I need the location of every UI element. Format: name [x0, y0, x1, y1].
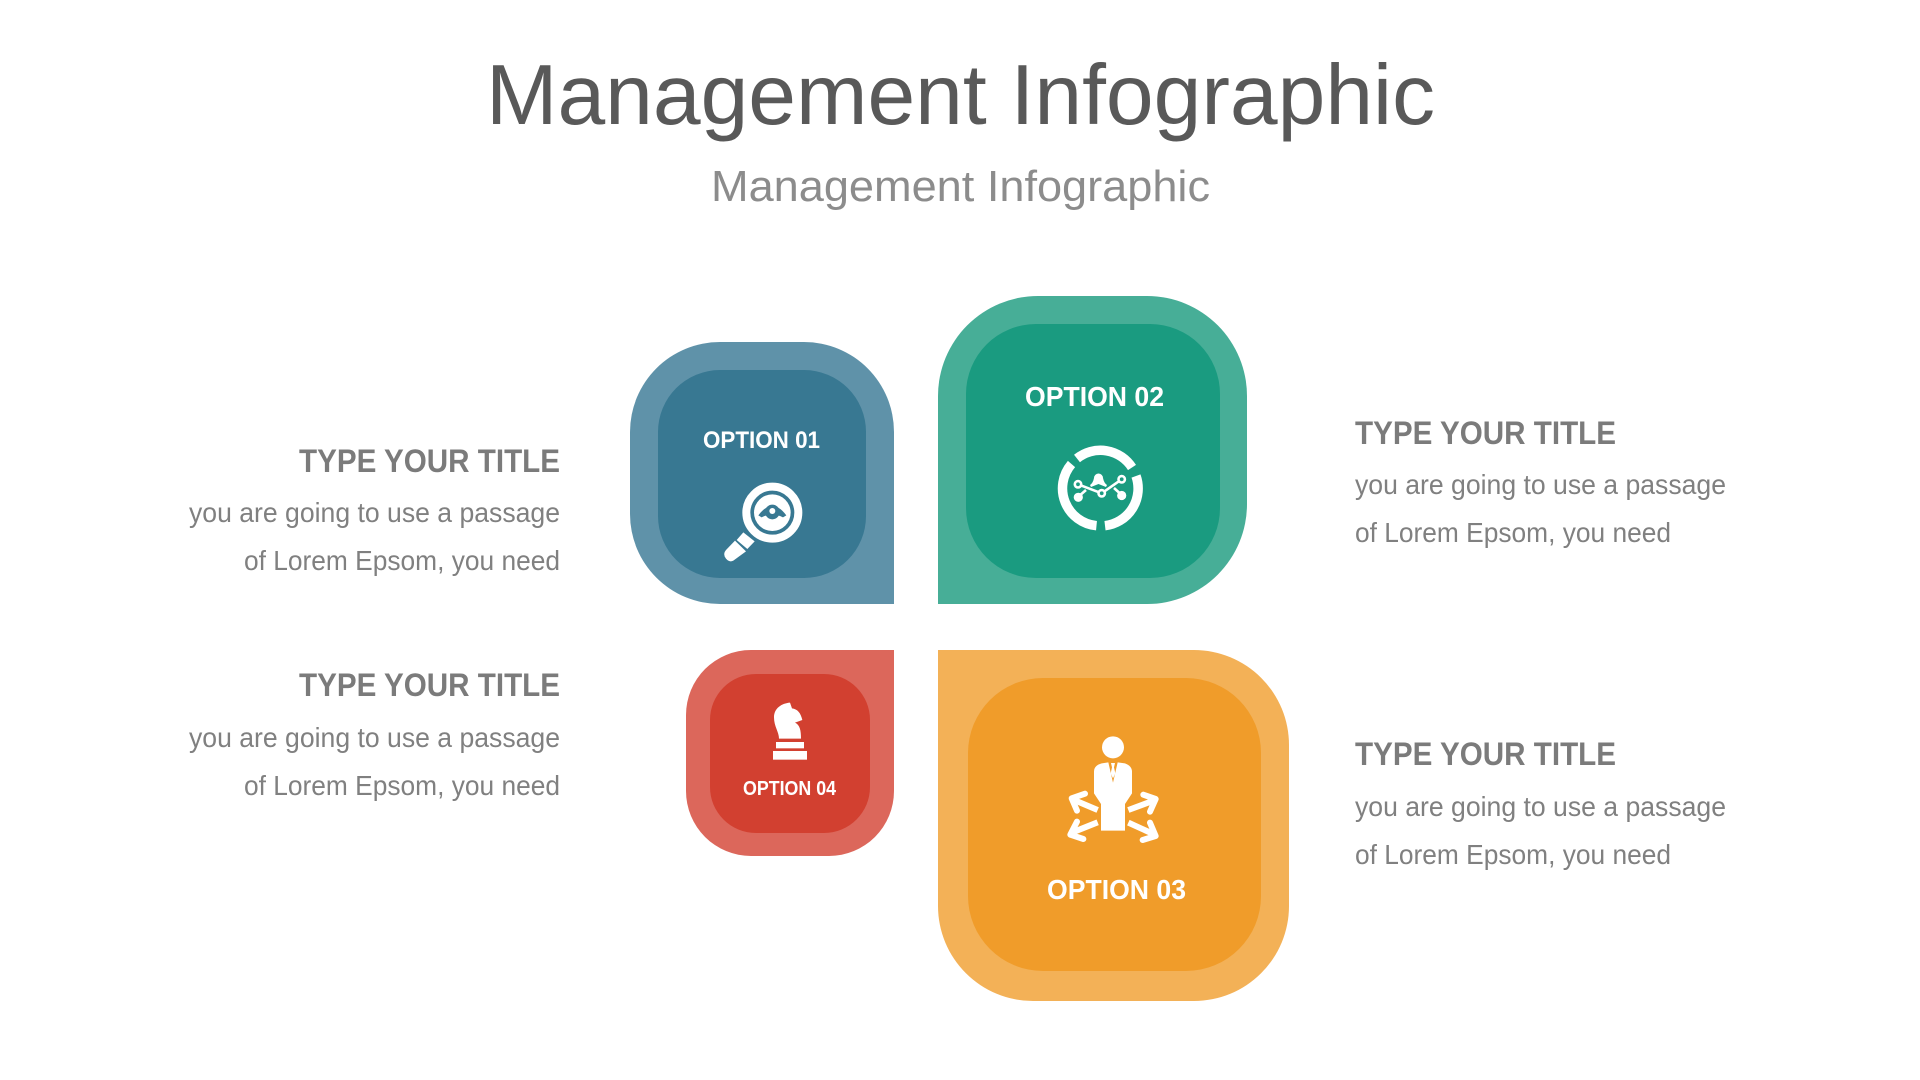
- option 01 inner shape: [658, 370, 866, 578]
- text block: option 01 description: [189, 443, 560, 576]
- text block: option 04 description: [189, 667, 560, 801]
- text block: option 03 description: TYPE YOUR TITLE: [1355, 736, 1616, 772]
- subtitle: Management Infographic: [711, 162, 1210, 211]
- text block: option 02 description: you are going to use a passage: [1355, 469, 1726, 500]
- panel: option 02: [938, 296, 1247, 604]
- text block: option 04 description: you are going to use a passage: [189, 722, 560, 753]
- text block: option 02 description: of Lorem Epsom, you need: [1355, 517, 1671, 548]
- option 01 outer shape: [630, 342, 894, 604]
- text block: option 03 description: of Lorem Epsom, you need: [1355, 839, 1671, 870]
- option 01 label: OPTION 01: [703, 427, 820, 454]
- icon: magnifying glass with eye: [724, 487, 798, 561]
- option 04 inner shape: [710, 674, 870, 833]
- panel: option 01: [630, 342, 894, 604]
- panel: option 03: [938, 650, 1289, 1001]
- text block: option 04 description: of Lorem Epsom, you need: [244, 770, 560, 801]
- text block: option 03 description: [1355, 736, 1726, 870]
- text block: option 04 description: TYPE YOUR TITLE: [299, 667, 560, 703]
- text block: option 02 description: [1355, 415, 1726, 548]
- text block: option 01 description: of Lorem Epsom, you need: [244, 545, 560, 576]
- option 02 label: OPTION 02: [1025, 381, 1164, 412]
- option 03 label: OPTION 03: [1047, 874, 1186, 905]
- text block: option 03 description: you are going to use a passage: [1355, 791, 1726, 822]
- option 03 outer shape: [938, 650, 1289, 1001]
- panel: option 04: [686, 650, 894, 856]
- icon: chess knight: [773, 703, 807, 760]
- option 02 inner shape: [966, 324, 1220, 578]
- option 03 inner shape: [968, 678, 1261, 971]
- text block: option 01 description: you are going to use a passage: [189, 497, 560, 528]
- title: Management Infographic: [486, 48, 1435, 143]
- option 04 outer shape: [686, 650, 894, 856]
- text block: option 02 description: TYPE YOUR TITLE: [1355, 415, 1616, 451]
- text block: option 01 description: TYPE YOUR TITLE: [299, 443, 560, 479]
- option 02 outer shape: [938, 296, 1247, 604]
- icon: businessman with arrows: [1070, 736, 1156, 840]
- option 04 label: OPTION 04: [743, 778, 837, 800]
- icon: segmented ring with network: [1063, 450, 1138, 526]
